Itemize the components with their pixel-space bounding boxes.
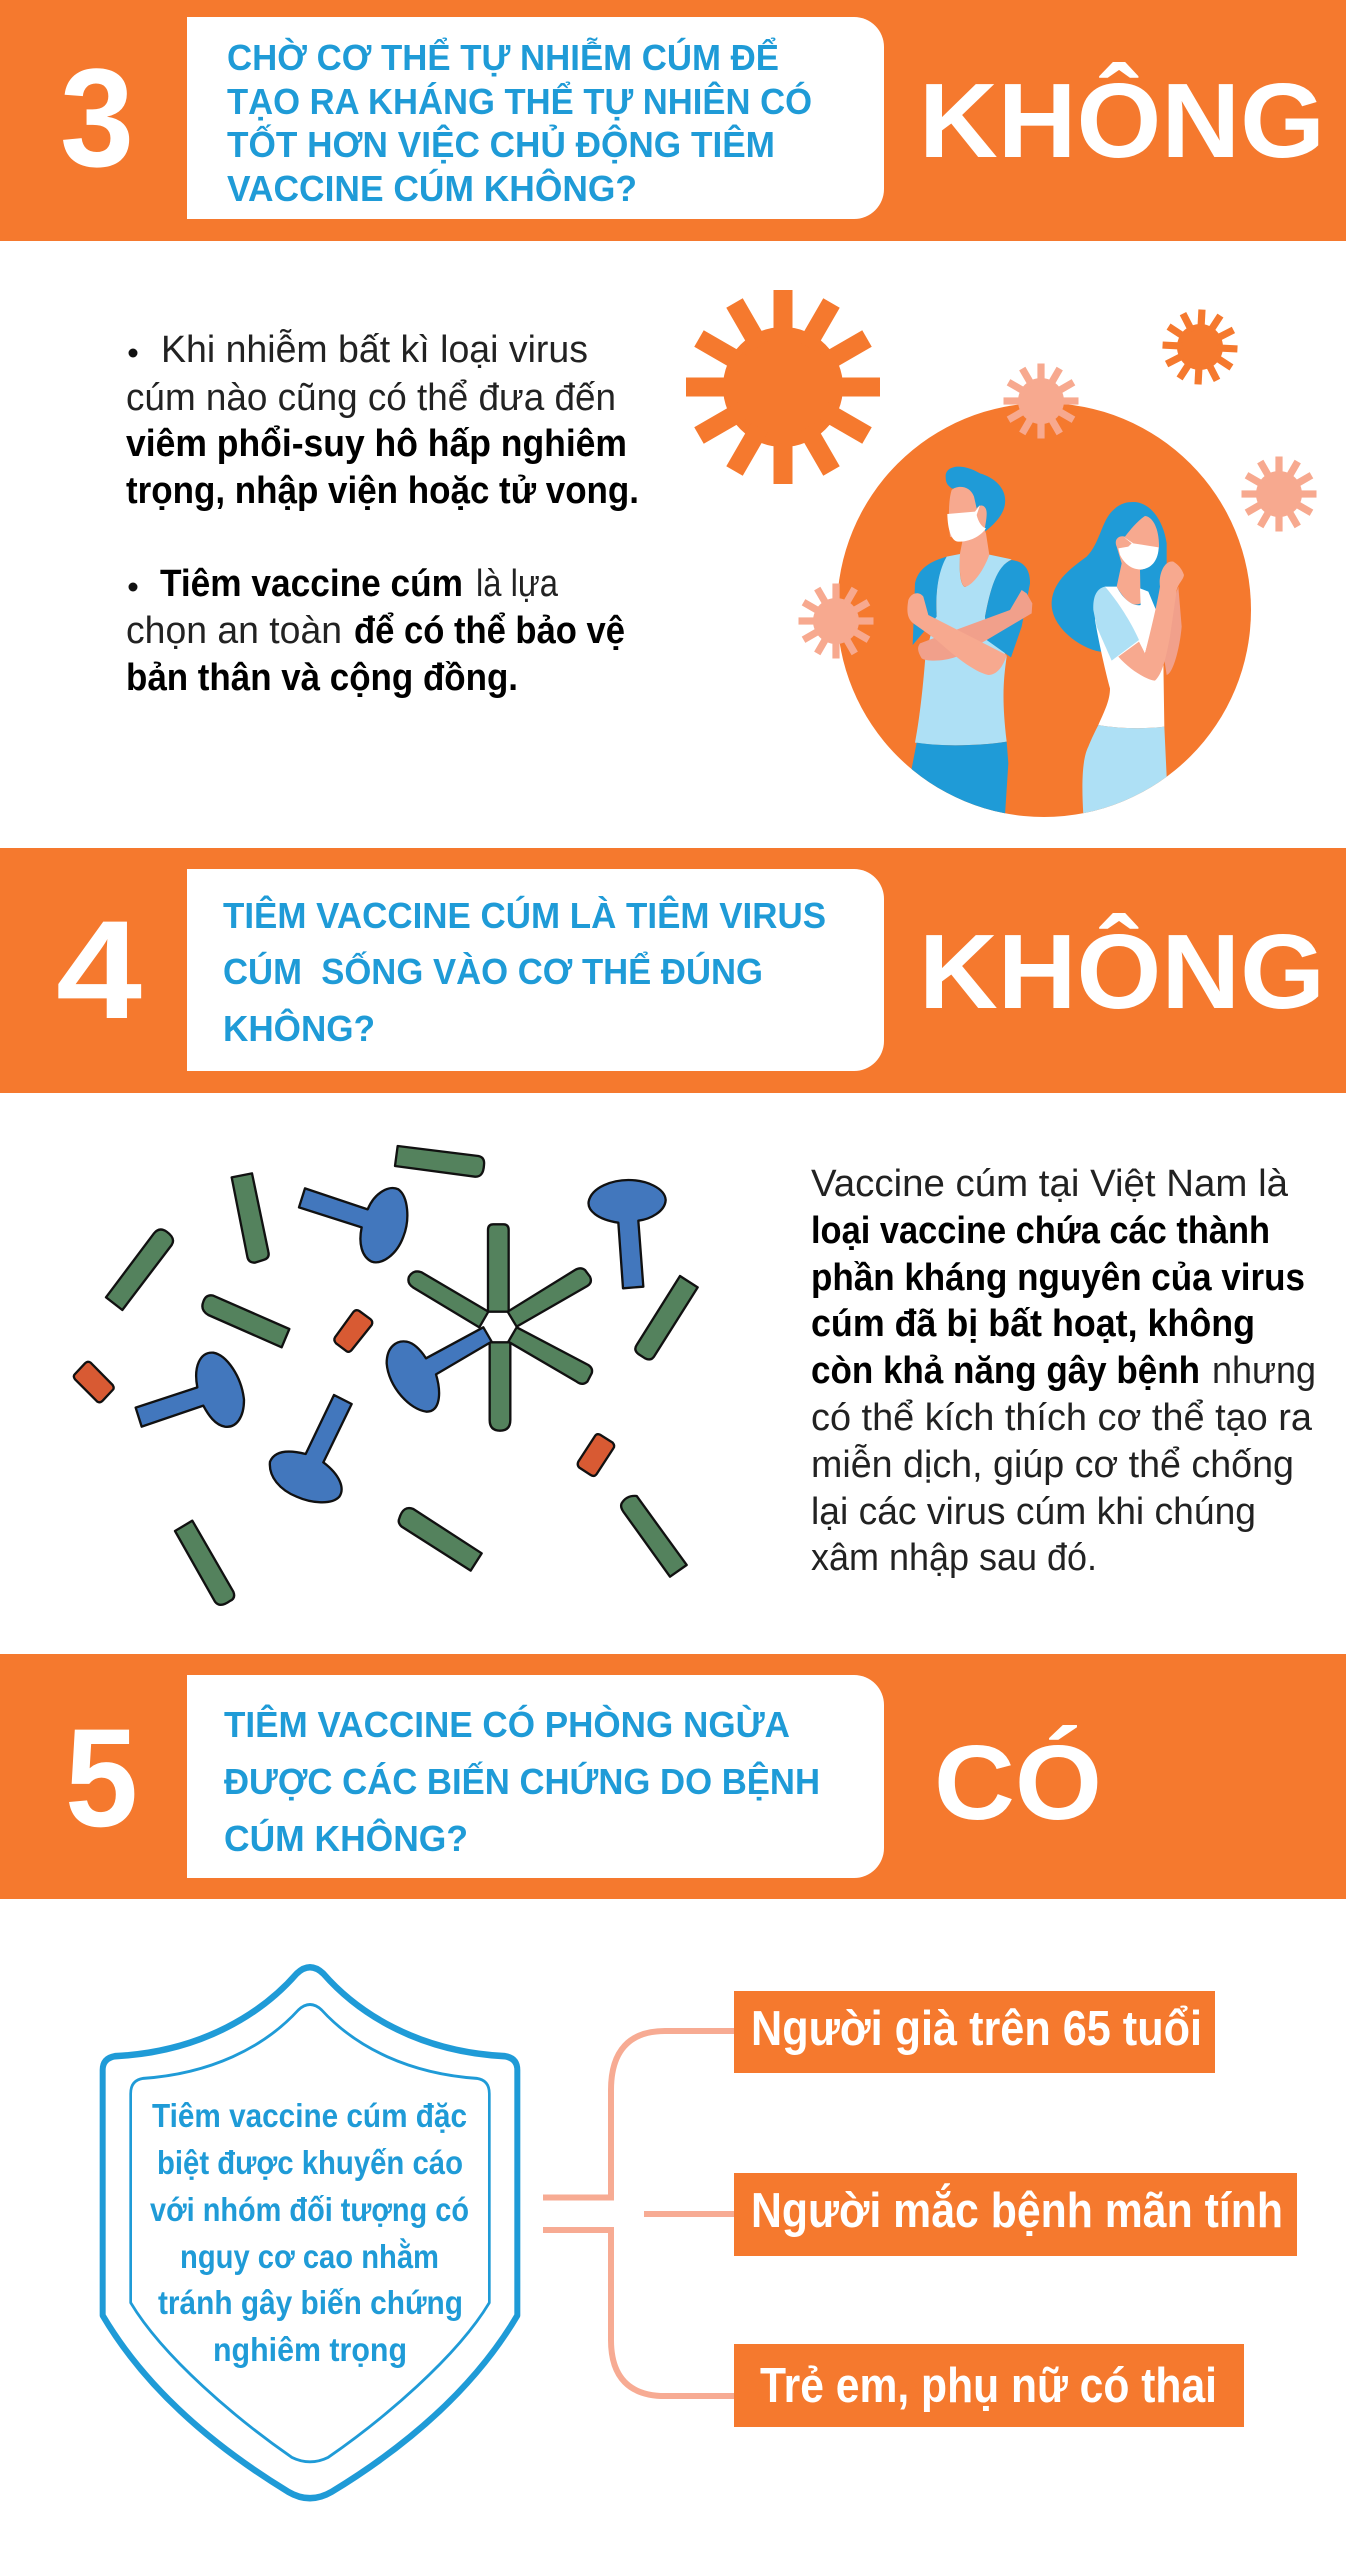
answer: có: CÓ (934, 1724, 1102, 1842)
text block: question 3 explanation: để có thể bảo vệ (354, 610, 625, 652)
text block: question 4 explanation: Vaccine cúm tại Việt Nam là (811, 1163, 1289, 1205)
shield text (150, 2097, 469, 2368)
shield text: Tiêm vaccine cúm đặc (152, 2097, 467, 2134)
text block: question 3 explanation: cúm nào cũng có thể đưa đến (126, 377, 616, 419)
question 4 box (187, 869, 884, 1071)
illustration: inactivated virus fragments (74, 1146, 698, 1605)
text block: question 4 explanation: cúm đã bị bất hoạt, không (811, 1303, 1255, 1345)
man (907, 467, 1032, 815)
text block: question 3 explanation: trọng, nhập viện hoặc tử vong. (126, 470, 639, 512)
callout: children and pregnant women (734, 2344, 1244, 2427)
callout: chronic illness group: Người mắc bệnh mãn tính (751, 2183, 1283, 2238)
blue fragments left (136, 1188, 407, 1502)
answer: không: KHÔNG (919, 62, 1325, 180)
panel: question 5 header band (0, 1654, 1346, 1899)
icon: pink virus top (1004, 364, 1078, 438)
callout: children and pregnant women: Trẻ em, phụ nữ có thai (760, 2359, 1217, 2413)
text block: question 4 explanation: loại vaccine chứa các thành (811, 1210, 1270, 1252)
question 3 heading: TỐT HƠN VIỆC CHỦ ĐỘNG TIÊM (227, 123, 775, 165)
text block: question 3 explanation: Tiêm vaccine cúm (160, 563, 463, 605)
question 5 box (187, 1675, 884, 1878)
callout: chronic illness group (734, 2173, 1297, 2256)
text block: question 3 explanation: Khi nhiễm bất kì loại virus (161, 328, 588, 371)
connector lines (543, 2031, 734, 2396)
text block: question 3 explanation: viêm phổi-suy hô hấp nghiêm (126, 423, 627, 465)
text block: question 3 explanation: là lựa (476, 563, 559, 605)
red fragment right (578, 1434, 614, 1476)
icon: small orange virus (1161, 308, 1239, 386)
icon: pink virus right (1242, 456, 1316, 532)
text block: question 4 explanation: nhưng (1212, 1350, 1316, 1392)
question 3 heading: VACCINE CÚM KHÔNG? (227, 167, 637, 209)
shield text: với nhóm đối tượng có (150, 2191, 469, 2228)
panel: question 4 header band (0, 848, 1346, 1093)
text block: question 4 explanation: xâm nhập sau đó. (811, 1537, 1097, 1579)
text block: question 3 explanation: bản thân và cộng đồng. (126, 657, 518, 699)
question 4 heading: TIÊM VACCINE CÚM LÀ TIÊM VIRUS (223, 894, 826, 936)
text block: question 4 explanation: có thể kích thích cơ thể tạo ra (811, 1397, 1313, 1439)
question 5 heading: CÚM KHÔNG? (224, 1817, 468, 1859)
text block: question 3 explanation (126, 328, 639, 699)
callout: elderly group (734, 1991, 1215, 2073)
question 5 heading (224, 1703, 820, 1859)
question 4 heading: KHÔNG? (223, 1007, 375, 1049)
shield text: nghiêm trọng (213, 2331, 407, 2368)
shield text: biệt được khuyến cáo (157, 2144, 463, 2181)
number 3: 3 (60, 39, 134, 196)
answer: không: KHÔNG (919, 913, 1325, 1031)
green fragments right (395, 1146, 698, 1577)
text block: question 4 explanation: miễn dịch, giúp cơ thể chống (811, 1443, 1294, 1486)
question 3 box (187, 17, 884, 219)
fragments, right group (387, 1146, 698, 1577)
panel: question 3 header band (0, 0, 1346, 241)
text block: question 4 explanation (811, 1163, 1316, 1579)
icon: pink virus left (798, 584, 874, 658)
illustration: two people wearing masks in orange circle (837, 403, 1251, 817)
icon: large virus (686, 290, 880, 484)
text block: question 3 explanation: chọn an toàn (126, 610, 342, 652)
text block: question 4 explanation: còn khả năng gây bệnh (811, 1350, 1200, 1392)
shield text: nguy cơ cao nhằm (180, 2238, 439, 2275)
number 5: 5 (65, 1699, 138, 1856)
icon: shield with recommendation (103, 1967, 517, 2498)
shield text: tránh gây biến chứng (158, 2284, 463, 2321)
red fragments left (74, 1310, 372, 1402)
text block: question 4 explanation: phần kháng nguyên của virus (811, 1257, 1305, 1299)
number 4: 4 (56, 891, 142, 1048)
question 3 heading: TẠO RA KHÁNG THỂ TỰ NHIÊN CÓ (227, 80, 812, 122)
question 3 heading: CHỜ CƠ THỂ TỰ NHIỄM CÚM ĐỂ (227, 36, 779, 78)
green fragments left (106, 1173, 289, 1605)
fragments, left group (74, 1173, 407, 1605)
blue fragments right (387, 1180, 666, 1412)
question 3 heading (227, 36, 812, 209)
woman (1052, 502, 1184, 815)
question 5 heading: ĐƯỢC CÁC BIẾN CHỨNG DO BỆNH (224, 1760, 820, 1802)
callout: elderly group: Người già trên 65 tuổi (751, 2002, 1202, 2056)
question 5 heading: TIÊM VACCINE CÓ PHÒNG NGỪA (224, 1703, 790, 1745)
question 4 heading (223, 894, 826, 1049)
text block: question 4 explanation: lại các virus cúm khi chúng (811, 1491, 1256, 1533)
question 4 heading: CÚM SỐNG VÀO CƠ THỂ ĐÚNG (223, 950, 763, 992)
